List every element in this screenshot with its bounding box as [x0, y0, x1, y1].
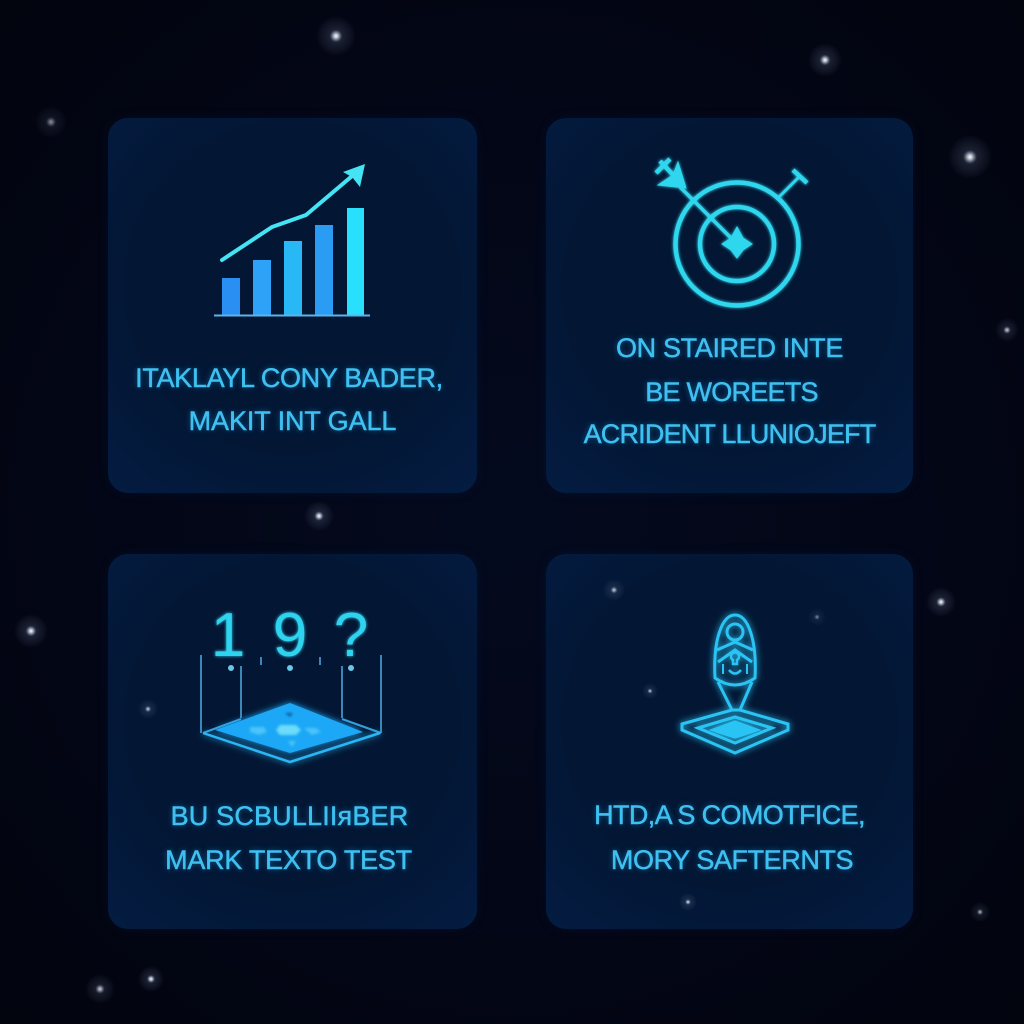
- numeric glyphs: ?: [334, 601, 368, 670]
- panel: target: [546, 118, 913, 493]
- numeric glyphs: 1: [211, 601, 245, 670]
- panel text: BE WOREETS: [645, 377, 818, 407]
- icon: numbers over platform: [201, 601, 381, 762]
- numeric glyphs: [211, 601, 368, 670]
- panel text: [592, 800, 866, 875]
- panel: growth chart: [108, 118, 477, 493]
- panel text: MAKIT INT GALL: [189, 406, 396, 436]
- icon: rising bar chart with arrow: [214, 164, 370, 316]
- panel text: ON STAIRED INTE: [616, 333, 843, 363]
- panel text: [134, 363, 444, 436]
- panel: hologram: [546, 554, 913, 929]
- stars over panels: [138, 579, 826, 911]
- icon: target with arrow: [656, 159, 807, 306]
- panel text: BU SCBULLIIᴙBER: [171, 801, 408, 831]
- panel: data platform: [108, 554, 477, 929]
- panel text: ACRIDENT LLUNIOJEFT: [584, 419, 875, 449]
- panel text: [582, 333, 877, 449]
- panel text: MARK TEXTO TEST: [165, 845, 412, 875]
- icon: hologram capsule on pedestal: [682, 615, 788, 753]
- numeric glyphs: 9: [273, 601, 307, 670]
- panel text: ITAKLAYL CONY BADER,: [135, 363, 443, 393]
- panel text: [164, 801, 413, 875]
- panel text: MORY SAFTERNTS: [611, 845, 853, 875]
- panel text: HTD,A S COMOTFICE,: [594, 800, 865, 830]
